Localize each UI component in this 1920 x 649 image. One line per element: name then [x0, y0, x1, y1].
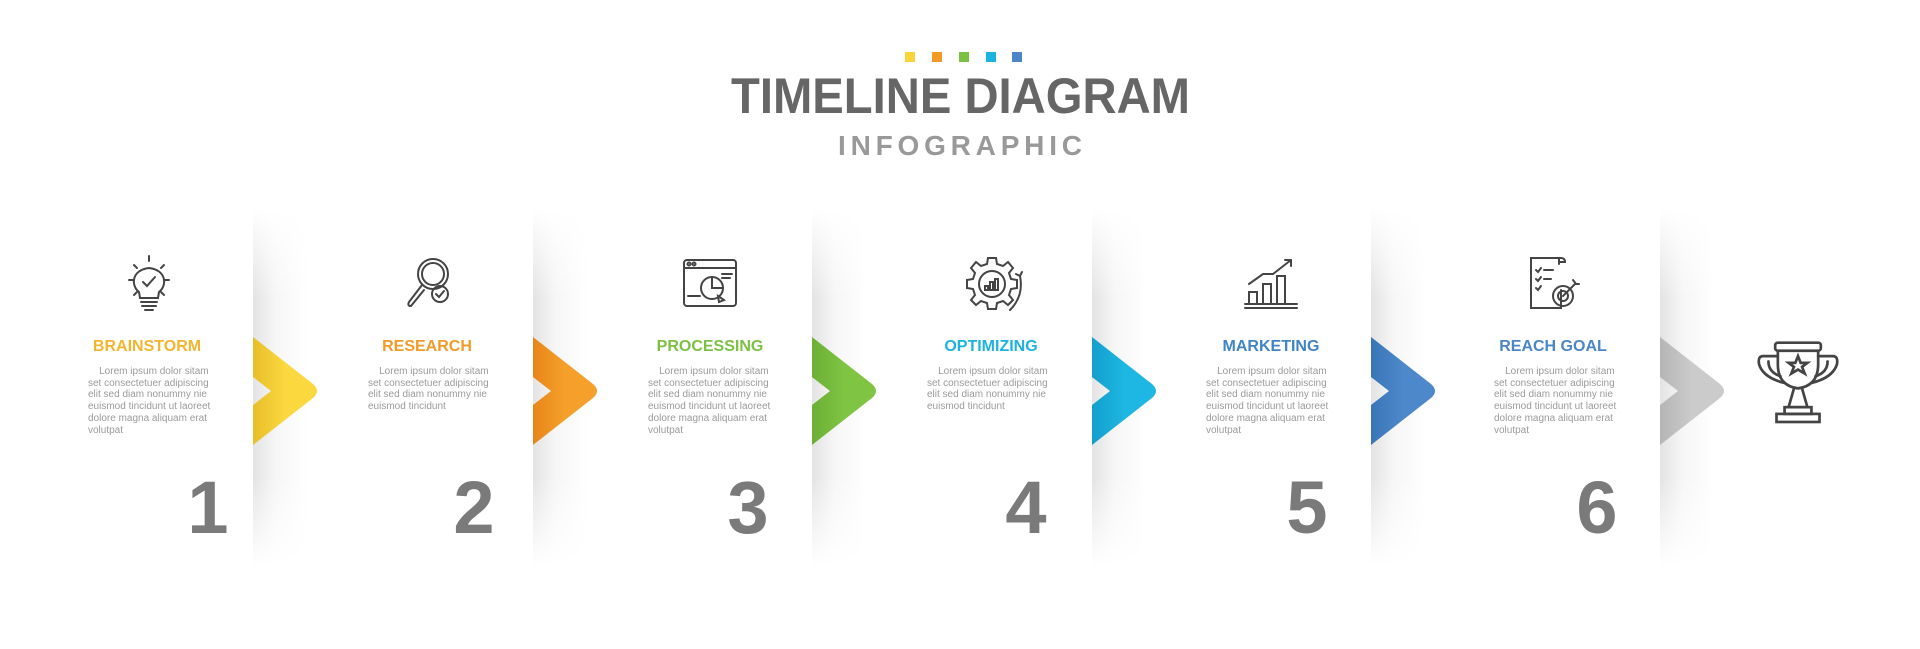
text: volutpat: [648, 425, 683, 436]
text: elit sed diam nonummy nie: [1494, 389, 1613, 400]
icon: gear: [966, 257, 1023, 311]
body texts: volutpat: [88, 425, 123, 436]
text: 5: [1286, 466, 1328, 549]
text: set consectetuer adipiscing: [1494, 378, 1615, 389]
color squares: [905, 52, 1022, 62]
arrow 5: [1371, 337, 1435, 445]
text: Lorem ipsum dolor sitam: [379, 366, 489, 377]
text: euismod tincidunt ut laoreet: [1206, 401, 1328, 412]
title: TIMELINE DIAGRAM: [731, 68, 1190, 124]
text: 4: [1005, 466, 1047, 549]
text: elit sed diam nonummy nie: [1206, 389, 1325, 400]
text: PROCESSING: [657, 338, 763, 355]
text: set consectetuer adipiscing: [1206, 378, 1327, 389]
icon: growth chart: [1244, 259, 1298, 309]
text: RESEARCH: [382, 338, 472, 355]
text: 6: [1576, 466, 1618, 549]
text: 3: [727, 466, 769, 549]
text: euismod tincidunt: [927, 401, 1005, 412]
text: euismod tincidunt ut laoreet: [1494, 401, 1616, 412]
icon: browser chart: [683, 259, 737, 307]
header: [731, 52, 1190, 160]
numbers: 1: [187, 466, 229, 549]
text: dolore magna aliquam erat: [1206, 413, 1325, 424]
icon: magnifier: [407, 258, 449, 307]
text: 2: [453, 466, 495, 549]
text: set consectetuer adipiscing: [927, 378, 1048, 389]
text: set consectetuer adipiscing: [368, 378, 489, 389]
icon: checklist target: [1530, 257, 1580, 309]
text: euismod tincidunt ut laoreet: [648, 401, 770, 412]
arrow 3: [812, 337, 876, 445]
arrow 4: [1092, 337, 1156, 445]
text: REACH GOAL: [1499, 338, 1607, 355]
text: Lorem ipsum dolor sitam: [1505, 366, 1615, 377]
body texts: set consectetuer adipiscing: [88, 378, 209, 389]
text: volutpat: [1494, 425, 1529, 436]
text: elit sed diam nonummy nie: [648, 389, 767, 400]
icon: lightbulb: [128, 255, 170, 311]
body texts: Lorem ipsum dolor sitam: [99, 366, 209, 377]
body texts: [88, 366, 210, 436]
arrow 1: [253, 337, 317, 445]
text: Lorem ipsum dolor sitam: [938, 366, 1048, 377]
text: set consectetuer adipiscing: [648, 378, 769, 389]
text: OPTIMIZING: [944, 338, 1038, 355]
body texts: euismod tincidunt ut laoreet: [88, 401, 210, 412]
text: MARKETING: [1223, 338, 1319, 355]
arrow 2: [533, 337, 597, 445]
arrows: [253, 337, 1724, 445]
text: elit sed diam nonummy nie: [927, 389, 1046, 400]
text: Lorem ipsum dolor sitam: [659, 366, 769, 377]
text: dolore magna aliquam erat: [1494, 413, 1613, 424]
arrow 6: [1660, 337, 1724, 445]
body texts: elit sed diam nonummy nie: [88, 389, 207, 400]
titles: BRAINSTORM: [93, 338, 201, 355]
text: volutpat: [1206, 425, 1241, 436]
text: dolore magna aliquam erat: [648, 413, 767, 424]
text: Lorem ipsum dolor sitam: [1217, 366, 1327, 377]
text: euismod tincidunt: [368, 401, 446, 412]
text: elit sed diam nonummy nie: [368, 389, 487, 400]
body texts: dolore magna aliquam erat: [88, 413, 207, 424]
icon: trophy: [1757, 341, 1839, 424]
